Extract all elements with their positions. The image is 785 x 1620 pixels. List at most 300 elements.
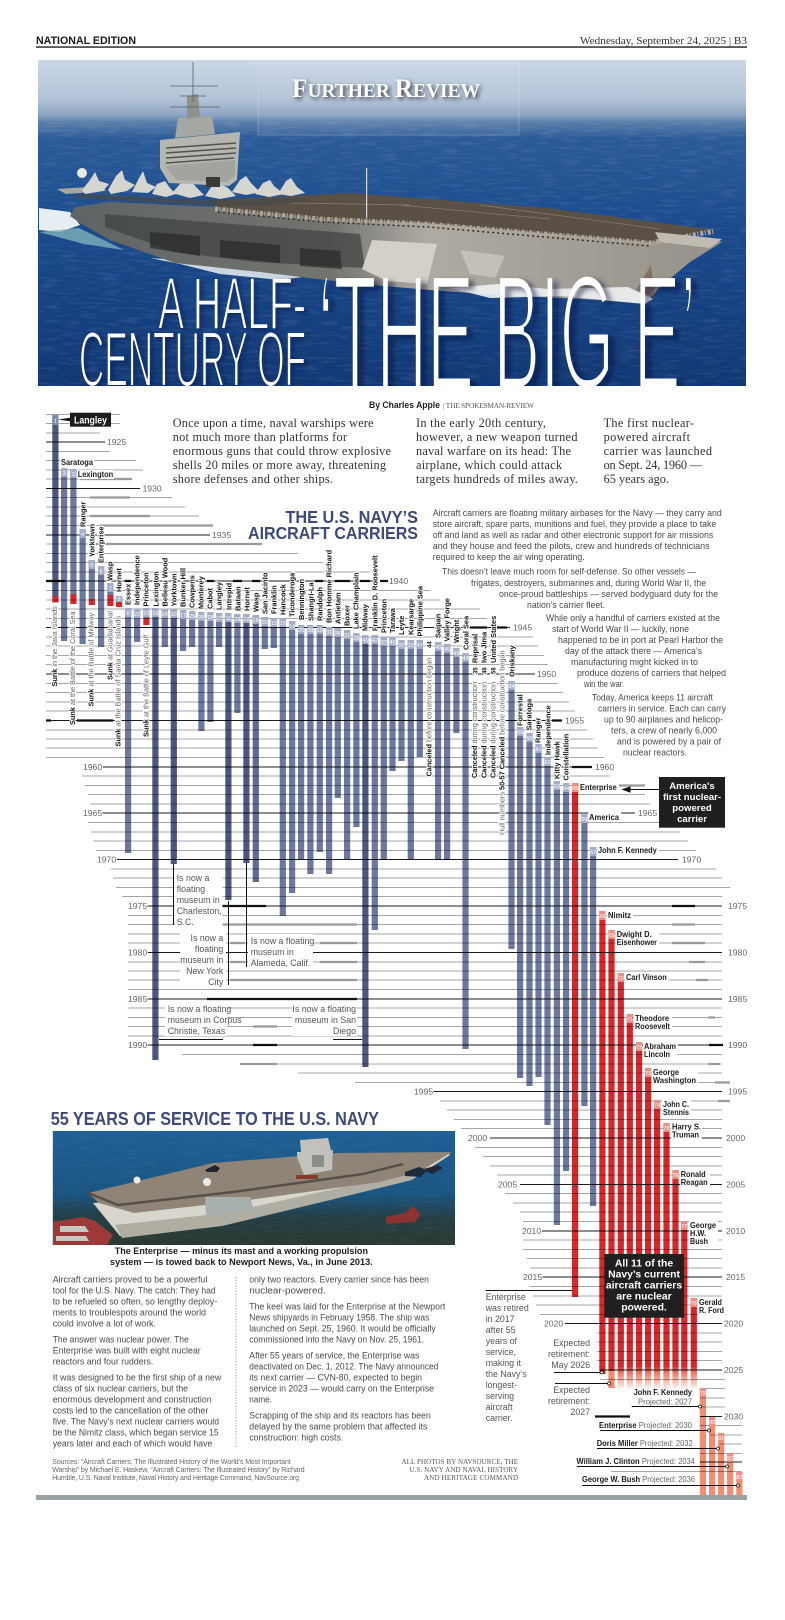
ship names: horizontal early carriers <box>60 457 114 479</box>
ship names: vertical labels for WWII-era carriers: San Jacinto <box>260 572 269 614</box>
page header: Wednesday, September 24, 2025 | B3 <box>580 36 747 47</box>
hull number tags on bars: 33 <box>408 643 414 649</box>
callout: all 11 current carriers are nuclear: All 11 of the <box>615 1258 673 1270</box>
notes: expected retirements of Nimitz and Eisenhower: 2027 <box>570 1407 590 1417</box>
ship names: vertical labels for WWII-era carriers: Princeton <box>379 598 388 633</box>
notes: expected retirements of Nimitz and Eisenhower <box>548 1338 610 1417</box>
year labels on the time axis: 1965 <box>83 808 102 818</box>
notes: expected retirements of Nimitz and Eisenhower: May 2026 <box>551 1360 590 1370</box>
ship names: vertical labels for WWII-era carriers: Lexington <box>151 571 160 606</box>
hull number tags on bars: 49 <box>453 651 459 657</box>
ship names: vertical labels for WWII-era carriers: Princeton <box>142 572 151 606</box>
article text: left column: costs led to the cancellation of the other <box>53 1406 208 1416</box>
year labels on the time axis: 2000 <box>726 1133 745 1143</box>
canceled ship labels <box>424 641 506 835</box>
hull number tags on bars: 36 <box>335 631 341 637</box>
museum notes with leader lines: Is now a floating <box>168 1004 231 1014</box>
ship names: vertical labels for WWII-era carriers: Cabot <box>206 588 215 609</box>
year labels on the time axis: 1990 <box>128 1040 147 1050</box>
callout: all 11 current carriers are nuclear: aircraft carriers <box>606 1280 682 1292</box>
article text: left column: years later and each of which would have <box>53 1438 212 1448</box>
article text: left column: be the Nimitz class, which began service 15 <box>53 1428 219 1438</box>
hull number tags on bars: 31 <box>326 630 332 636</box>
hull number tags on bars: 2 <box>72 472 75 478</box>
hull number tags on bars: 11 <box>226 616 231 622</box>
callout: all 11 current carriers are nuclear: are nuclear <box>616 1292 672 1302</box>
explainer text wrapping the staircase: day of the attack there — America’s <box>565 646 702 656</box>
article text: right column: The keel was laid for the Enterprise at the Newport <box>249 1302 446 1312</box>
note: Enterprise retirement: Enterprise <box>486 1292 526 1302</box>
labels: projected future carriers: William J. Clinton Projected: 2034 <box>576 1456 695 1466</box>
note: Enterprise retirement: in 2017 <box>486 1314 515 1324</box>
labels: projected future carriers: Projected: 2027 <box>638 1396 692 1406</box>
notes: expected retirements of Nimitz and Eisenhower: retirement: <box>548 1396 590 1406</box>
hull number tags on bars: 23 <box>143 611 149 617</box>
article text: left column: The answer was nuclear power. The <box>53 1334 189 1344</box>
hull number tags on bars: 79 <box>700 1391 706 1397</box>
canceled ship labels: Hull numbers 50-57 Canceled before construction began <box>498 650 506 835</box>
ship names: horizontal early carriers: Saratoga <box>61 457 93 467</box>
hull number tags on bars: 9 <box>127 611 130 617</box>
intro text: three serif columns: Once upon a time, naval warships were <box>173 416 374 430</box>
ship names: horizontal labels for later carriers: Gerald <box>699 1297 722 1307</box>
hull number tags on bars: 47 <box>417 643 423 649</box>
ship names: vertical labels for WWII-era carriers <box>78 501 570 780</box>
intro text: three serif columns: naval warfare on its head: The <box>416 444 572 458</box>
hull number tags on bars: 42 <box>372 638 378 644</box>
sunk labels beneath bars <box>50 606 151 746</box>
hero photo: USS Enterprise at sea <box>38 59 746 386</box>
article text: left column: class of six nuclear carriers, but the <box>53 1384 188 1394</box>
museum notes with leader lines: museum in <box>180 955 223 965</box>
year labels on the time axis: 1945 <box>513 622 532 632</box>
year labels on the time axis: 2015 <box>523 1272 542 1282</box>
hull number tags on bars: 60 <box>526 736 532 742</box>
photo caption: system — is towed back to Newport News, Va., in June 2013. <box>110 1257 373 1268</box>
hull number tags on bars: 15 <box>317 628 323 634</box>
year labels on the time axis: 2005 <box>498 1180 517 1190</box>
hull number tags on bars: 45 <box>444 647 450 653</box>
ship names: horizontal labels for later carriers: Reagan <box>681 1177 708 1187</box>
explainer text wrapping the staircase: produce dozens of carriers that helped <box>577 668 726 678</box>
intro text: three serif columns: not much more than platforms for <box>173 430 347 444</box>
explainer text wrapping the staircase: carriers in service. Each can carry <box>598 704 726 714</box>
callout: Langley tag <box>58 413 111 427</box>
museum notes with leader lines: museum in <box>251 947 294 957</box>
hull number tags on bars: 5 <box>90 563 93 569</box>
ship names: horizontal labels for later carriers: Bush <box>690 1236 708 1246</box>
sunk labels beneath bars: Sunk in the Java Islands <box>50 606 59 686</box>
kicker: Further Review: FURTHER REVIEW <box>292 74 480 103</box>
sources: Sources: “Aircraft Carriers: The Illustrated History of the World’s Most Important <box>52 1459 291 1466</box>
hull number tags on bars: 64 <box>563 786 569 792</box>
page header: NATIONAL EDITION <box>36 35 136 47</box>
ship names: horizontal labels for later carriers: Stennis <box>663 1107 689 1117</box>
ship names: vertical labels for WWII-era carriers: Yorktown <box>170 573 179 606</box>
heading: 55 years of service: 55 YEARS OF SERVICE TO THE U.S. NAVY <box>51 1109 379 1129</box>
hull number tags on bars: 63 <box>554 784 560 790</box>
hull number tags on bars: 34 <box>508 684 514 690</box>
hull number tags on bars: 21 <box>344 633 350 639</box>
hull number tags on bars: 12 <box>243 617 249 623</box>
ship names: vertical labels for WWII-era carriers: Hornet <box>115 568 124 592</box>
ship names: horizontal early carriers: Lexington <box>78 469 113 479</box>
hull number tags on bars: 16 <box>152 611 158 617</box>
hull number tags on bars: 17 <box>180 613 186 619</box>
callout: America's first nuclear-powered carrier: powered <box>672 803 712 814</box>
main headline: A HALF- <box>158 262 306 345</box>
intro text: three serif columns: airplane, which could attack <box>416 458 563 472</box>
ship names: vertical labels for WWII-era carriers: United States <box>489 616 498 663</box>
explainer text wrapping the staircase: While only a handful of carriers existed at the <box>546 613 720 623</box>
year labels on the time axis: 1965 <box>638 808 657 818</box>
callout: all 11 current carriers are nuclear: Navy’s current <box>608 1270 680 1280</box>
hull number tags on bars: 19 <box>280 621 286 627</box>
ship names: vertical labels for WWII-era carriers: Ticonderoga <box>288 572 297 617</box>
photo caption: The Enterprise — minus its mast and a working propulsion <box>115 1246 368 1257</box>
article text: right column: nuclear-powered. <box>249 1286 326 1296</box>
note: Enterprise retirement: longest- <box>486 1380 517 1390</box>
hull number tags on bars: 72 <box>636 1045 642 1051</box>
article text: right column: service in 2023 — would carry on the Enterprise <box>249 1384 434 1394</box>
article text: left column <box>53 1274 222 1448</box>
year labels on the time axis: 2010 <box>522 1226 541 1236</box>
hull number tags on bars: 81 <box>718 1436 724 1442</box>
ship names: vertical labels for WWII-era carriers: Leyte <box>397 616 406 635</box>
year labels on the time axis: 1940 <box>389 576 408 586</box>
hull number tags on bars: 6 <box>100 569 103 575</box>
photo credit <box>402 1458 518 1482</box>
ship names: vertical labels for WWII-era carriers: Monterey <box>197 575 206 609</box>
note: Enterprise retirement: after 55 <box>486 1325 516 1335</box>
bars: nuclear carriers in red <box>572 783 697 1392</box>
hull number tags on bars: 59 <box>517 730 523 736</box>
explainer text wrapping the staircase: up to 90 airplanes and helicop- <box>604 714 723 724</box>
article text: left column: It was designed to be the first ship of a new <box>53 1372 222 1382</box>
labels: projected future carriers: Enterprise Projected: 2030 <box>599 1420 692 1430</box>
ship names: vertical labels for WWII-era carriers: Lake Champlain <box>352 572 361 629</box>
ship names: vertical labels for WWII-era carriers: Coral Sea <box>461 615 470 650</box>
hull number tags on bars: 69 <box>608 933 614 939</box>
note: Enterprise retirement: the Navy’s <box>486 1369 527 1379</box>
museum notes with leader lines: City <box>208 977 224 987</box>
canceled ship labels: 46 <box>482 667 488 674</box>
hull number tags on bars: 78 <box>691 1301 697 1307</box>
ship names: vertical labels for WWII-era carriers: Wasp <box>251 592 260 612</box>
explainer text wrapping the staircase: start of World War II — luckily, none <box>552 624 689 634</box>
bars: sinking markers in red <box>52 594 149 625</box>
year labels on the time axis: 1930 <box>142 484 162 494</box>
ship names: vertical labels for WWII-era carriers: Franklin <box>269 585 278 614</box>
sources <box>52 1459 305 1482</box>
year labels on the time axis: 2020 <box>724 1318 743 1328</box>
sources: Warship” by Michael E. Haskew, “Aircraft Carriers: The Illustrated History” by Richard <box>52 1467 305 1474</box>
ship names: vertical labels for WWII-era carriers: Tarawa <box>388 607 397 633</box>
labels: projected future carriers: Doris Miller Projected: 2032 <box>597 1438 693 1448</box>
intro text: three serif columns: on Sept. 24, 1960 — <box>604 458 703 472</box>
ship names: vertical labels for WWII-era carriers: Ranger <box>78 501 87 527</box>
explainer text wrapping the staircase: frigates, destroyers, submarines and, during World War II, the <box>471 578 706 588</box>
hull number tags on bars: 65 <box>572 786 578 792</box>
ship names: horizontal labels for later carriers <box>579 782 726 1315</box>
ship names: horizontal labels for later carriers: George <box>690 1220 716 1230</box>
callout: Langley tag: Langley <box>74 416 107 426</box>
explainer text wrapping the staircase <box>433 508 726 758</box>
article text: right column: its next carrier — CVN-80, expected to begin <box>249 1372 422 1382</box>
article text: left column: ments to troublespots around the world <box>53 1308 206 1318</box>
hull number tags on bars: 75 <box>664 1126 670 1132</box>
museum notes with leader lines <box>159 863 362 1040</box>
year labels on the time axis: 1980 <box>728 948 747 958</box>
year labels on the time axis: 2010 <box>726 1226 745 1236</box>
article text: left column: to be refueled so often, so lengthy deploy- <box>53 1296 217 1306</box>
note: Enterprise retirement: making it <box>486 1358 521 1368</box>
callout: all 11 current carriers are nuclear <box>604 1254 684 1318</box>
canceled ship labels: Canceled before construction began <box>424 658 433 776</box>
ship names: vertical labels for WWII-era carriers: Philippine Sea <box>416 585 425 636</box>
canceled ship labels: Canceled during construction <box>479 682 488 778</box>
year labels on the time axis: 1985 <box>128 994 147 1004</box>
ship names: horizontal labels for later carriers: George <box>653 1067 679 1077</box>
museum notes with leader lines: museum in Corpus <box>168 1015 242 1025</box>
museum notes with leader lines: museum in <box>177 895 220 905</box>
museum notes with leader lines: floating <box>177 884 205 894</box>
article text: right column <box>236 1274 446 1447</box>
museum notes with leader lines: Alameda, Calif. <box>251 958 310 968</box>
canceled ship labels: 58 <box>492 667 498 674</box>
article text: right column: After 55 years of service, the Enterprise was <box>249 1350 420 1360</box>
year labels on the time axis: 1925 <box>107 437 126 447</box>
hull number tags on bars: 30 <box>262 620 268 626</box>
bars: projected future carriers in salmon <box>700 1388 742 1495</box>
ship names: vertical labels for WWII-era carriers: Oriskany <box>507 644 516 677</box>
hull number tags on bars: 8 <box>118 597 121 603</box>
ship names: horizontal labels for later carriers: Eisenhower <box>617 937 658 947</box>
explainer text wrapping the staircase: Today, America keeps 11 aircraft <box>592 692 713 702</box>
hull number tags on bars: 61 <box>536 747 542 753</box>
sunk labels beneath bars: Sunk at the Battle of Midway <box>87 612 96 706</box>
year labels on the time axis: 1950 <box>537 669 556 679</box>
article text: left column: Enterprise was built with eight nuclear <box>53 1346 201 1356</box>
museum notes with leader lines: Is now a floating <box>292 1004 356 1014</box>
ship names: vertical labels for WWII-era carriers: Hornet <box>242 587 251 611</box>
explainer text wrapping the staircase: This doesn’t leave much room for self-defense. So other vessels — <box>442 566 696 576</box>
ship names: vertical labels for WWII-era carriers: Saratoga <box>525 698 534 730</box>
callout: America's first nuclear-powered carrier: carrier <box>677 814 707 825</box>
hull number tags on bars: 24 <box>162 612 168 618</box>
explainer text wrapping the staircase: happened to be in port at Pearl Harbor the <box>558 635 723 645</box>
ship names: vertical labels for WWII-era carriers: Bunker Hill <box>179 568 188 607</box>
byline: | THE SPOKESMAN-REVIEW <box>443 401 534 410</box>
sunk labels beneath bars: Sunk at the Battle of Santa Cruz Islands <box>114 616 123 746</box>
year labels on the time axis: 1975 <box>128 901 147 911</box>
intro text: three serif columns: shore defenses and other ships. <box>173 472 333 486</box>
article text: right column: deactivated on Dec. 1, 2012. The Navy announced <box>249 1362 438 1372</box>
year labels on the time axis: 1970 <box>682 854 701 864</box>
hull number tags on bars: 18 <box>253 618 259 624</box>
explainer text wrapping the staircase: and is powered by a pair of <box>617 736 721 746</box>
ship names: horizontal labels for later carriers: Lincoln <box>644 1049 670 1059</box>
article text: right column: News shipyards in February 1958. The ship was <box>249 1312 430 1322</box>
ship names: vertical labels for WWII-era carriers: Independence <box>133 555 142 605</box>
ship names: vertical labels for WWII-era carriers: Forrestal <box>516 694 525 726</box>
hull number tags on bars: 38 <box>307 628 313 634</box>
heading: The U.S. Navy's aircraft carriers: THE U.S. NAVY’S <box>286 507 418 527</box>
museum notes with leader lines: floating <box>195 944 223 954</box>
ship names: vertical labels for WWII-era carriers: Kitty Hawk <box>552 740 561 779</box>
note: Enterprise retirement: serving <box>486 1391 514 1401</box>
notes: expected retirements of Nimitz and Eisenhower: Expected <box>553 1385 590 1395</box>
intro text: three serif columns: enormous guns that could throw explosive <box>173 444 392 458</box>
ship names: horizontal labels for later carriers: Ronald <box>681 1169 706 1179</box>
year labels on the time axis: 1970 <box>97 854 116 864</box>
ship names: horizontal labels for later carriers: H.W. <box>690 1228 706 1238</box>
ship names: vertical labels for WWII-era carriers: Bon Homme Richard <box>325 549 334 623</box>
bars: carriers preserved as museums, darker blue <box>52 415 369 1067</box>
hull number tags on bars: 14 <box>289 624 295 630</box>
callout: America's first nuclear-powered carrier: first nuclear- <box>663 792 721 803</box>
ship names: horizontal labels for later carriers: John F. Kennedy <box>598 845 657 855</box>
chart: carrier service bars <box>52 415 743 1495</box>
museum notes with leader lines: Is now a floating <box>251 936 314 946</box>
byline: By Charles Apple <box>369 400 440 411</box>
hull number tags on bars: 29 <box>234 617 240 623</box>
ship names: vertical labels for WWII-era carriers: Antietam <box>334 592 343 624</box>
article text: right column: construction: high costs. <box>249 1432 343 1442</box>
museum notes with leader lines: Charleston, <box>177 906 222 916</box>
ship names: horizontal labels for later carriers: R. Ford <box>699 1305 724 1315</box>
ship names: vertical labels for WWII-era carriers: Cowpens <box>188 575 197 608</box>
museum notes with leader lines: Diego <box>333 1026 356 1036</box>
explainer text wrapping the staircase: once-proud battleships — served bodyguard duty for the <box>499 589 718 599</box>
hull number tags on bars: 41 <box>362 638 368 644</box>
hull number tags on bars: 77 <box>681 1224 687 1230</box>
article text: left column: five. The Navy’s next nuclear carriers would <box>53 1416 219 1426</box>
hull number tags on bars: 83 <box>736 1475 742 1481</box>
explainer text wrapping the staircase: ters, a crew of nearly 6,000 <box>611 726 717 736</box>
ship names: vertical labels for WWII-era carriers: Langley <box>215 581 224 610</box>
museum notes with leader lines: museum in San <box>295 1015 356 1025</box>
hull number tags on bars: 20 <box>298 628 304 634</box>
explainer text wrapping the staircase: and they house and feed the pilots, crew and hundreds of technicians <box>433 541 710 551</box>
year labels on the time axis: 1960 <box>595 762 614 772</box>
heading: The U.S. Navy's aircraft carriers: AIRCRAFT CARRIERS <box>248 523 418 543</box>
intro text: three serif columns: 65 years ago. <box>604 472 669 486</box>
hull number tags on bars: 76 <box>672 1173 678 1179</box>
article text: left column: could involve a lot of work. <box>53 1318 156 1328</box>
explainer text wrapping the staircase: Aircraft carriers are floating military airbases for the Navy — they carry and <box>433 508 722 518</box>
article text: left column: Aircraft carriers proved to be a powerful <box>53 1274 207 1284</box>
hull number tags on bars: 70 <box>618 976 624 982</box>
year labels on the time axis: 1955 <box>565 716 584 726</box>
chart: year grid lines <box>46 414 742 1472</box>
ship names: vertical labels for WWII-era carriers: Shangri-La <box>306 582 315 621</box>
ship names: horizontal labels for later carriers: Dwight D. <box>617 929 652 939</box>
labels: projected future carriers: John F. Kennedy <box>634 1387 692 1397</box>
article text: right column: launched on Sept. 25, 1960. It would be officially <box>249 1324 436 1334</box>
hull number tags on bars: 4 <box>81 532 84 538</box>
bars: conventional carriers in blue <box>61 468 596 1225</box>
ship names: vertical labels for WWII-era carriers: Intrepid <box>224 582 233 610</box>
intro text: three serif columns: targets hundreds of miles away. <box>416 472 578 486</box>
hull number tags on bars: 68 <box>599 914 605 920</box>
hull number tags on bars: 7 <box>109 586 112 592</box>
ship names: horizontal labels for later carriers: America <box>589 812 619 822</box>
intro text: three serif columns: however, a new weapon turned <box>416 430 578 444</box>
notes: expected retirements of Nimitz and Eisenhower: retirement: <box>548 1349 590 1359</box>
year labels on the time axis <box>83 437 747 1422</box>
article text: right column: commissioned into the Navy on Nov. 25, 1961. <box>249 1334 424 1344</box>
note: Enterprise retirement: service, <box>486 1347 516 1357</box>
photo caption <box>110 1246 373 1268</box>
year labels on the time axis: 2020 <box>544 1318 563 1328</box>
ship names: vertical labels for WWII-era carriers: Enterprise <box>97 526 106 563</box>
year labels on the time axis: 2005 <box>726 1180 745 1190</box>
note: Enterprise retirement: aircraft <box>486 1402 513 1412</box>
notes: expected retirements of Nimitz and Eisenhower: Expected <box>553 1338 590 1348</box>
main headline: CENTURY OF <box>79 315 306 403</box>
ship names: vertical labels for WWII-era carriers: Wasp <box>106 561 115 581</box>
hull number tags on bars: 3 <box>63 471 66 477</box>
ship names: vertical labels for WWII-era carriers: Belleau Wood <box>160 557 169 606</box>
hull number tags on bars: 66 <box>581 817 587 823</box>
ship names: vertical labels for WWII-era carriers: Wright <box>452 619 461 643</box>
note: Enterprise retirement: was retired <box>485 1303 529 1313</box>
year labels on the time axis: 1975 <box>728 901 747 911</box>
ship names: vertical labels for WWII-era carriers: Constellation <box>561 733 570 780</box>
article text: left column: reactors and four rudders. <box>53 1356 153 1366</box>
ship names: vertical labels for WWII-era carriers: Saipan <box>433 613 442 638</box>
museum notes with leader lines: New York <box>186 966 224 976</box>
year labels on the time axis: 2030 <box>724 1412 743 1422</box>
year labels on the time axis: 2000 <box>468 1133 487 1143</box>
note: Enterprise retirement: carrier. <box>486 1413 513 1423</box>
article text: right column: delayed by the same problem that affected its <box>249 1422 428 1432</box>
hull number tags on bars: 10 <box>171 612 177 618</box>
canceled ship labels: 35 <box>473 667 479 674</box>
explainer text wrapping the staircase: nuclear reactors. <box>623 748 687 758</box>
museum notes with leader lines: Christie, Texas <box>168 1026 226 1036</box>
callout: America's first nuclear-powered carrier: America's <box>669 781 715 792</box>
ship names: horizontal labels for later carriers: Nimitz <box>608 910 631 920</box>
labels: projected future carriers <box>575 1387 740 1487</box>
hull number tags on bars: 1 <box>54 419 57 425</box>
sunk labels beneath bars: Sunk at the Battle of the Coral Sea <box>68 610 77 725</box>
canceled ship labels: 44 <box>427 641 433 648</box>
article text: right column: Scrapping of the ship and its reactors has been <box>249 1410 431 1420</box>
ship names: vertical labels for WWII-era carriers: Bataan <box>233 586 242 611</box>
ship names: vertical labels for WWII-era carriers: Boxer <box>343 605 352 626</box>
sunk labels beneath bars: Sunk at the Battle of Leyte Gulf <box>142 634 151 737</box>
article text: left column: tool for the U.S. Navy. The catch: They had <box>53 1286 216 1296</box>
year labels on the time axis: 1935 <box>212 530 231 540</box>
canceled ship labels: Canceled during construction <box>470 682 479 778</box>
year labels on the time axis: 1990 <box>728 1040 747 1050</box>
museum notes with leader lines: Is now a <box>191 933 223 943</box>
canceled ship labels: Canceled during construction <box>489 682 498 778</box>
hull number tags on bars: 32 <box>398 643 404 649</box>
sunk labels beneath bars: Sunk at Guadalcanal <box>105 611 114 680</box>
hull number tags on bars: 25 <box>189 614 195 620</box>
explainer text wrapping the staircase: off and land as well as radar and other electronic support for air missions <box>433 530 714 540</box>
ship names: horizontal labels for later carriers: Harry S. <box>672 1122 701 1132</box>
photo credit: U.S. NAVY AND NAVAL HISTORY <box>409 1466 518 1474</box>
heading: The U.S. Navy's aircraft carriers <box>248 507 418 543</box>
ship names: vertical labels for WWII-era carriers: Yorktown <box>87 523 96 557</box>
ship names: horizontal labels for later carriers: Truman <box>672 1130 699 1140</box>
year labels on the time axis: 1995 <box>728 1086 747 1096</box>
photo: Enterprise towed to Newport News <box>53 1131 455 1245</box>
